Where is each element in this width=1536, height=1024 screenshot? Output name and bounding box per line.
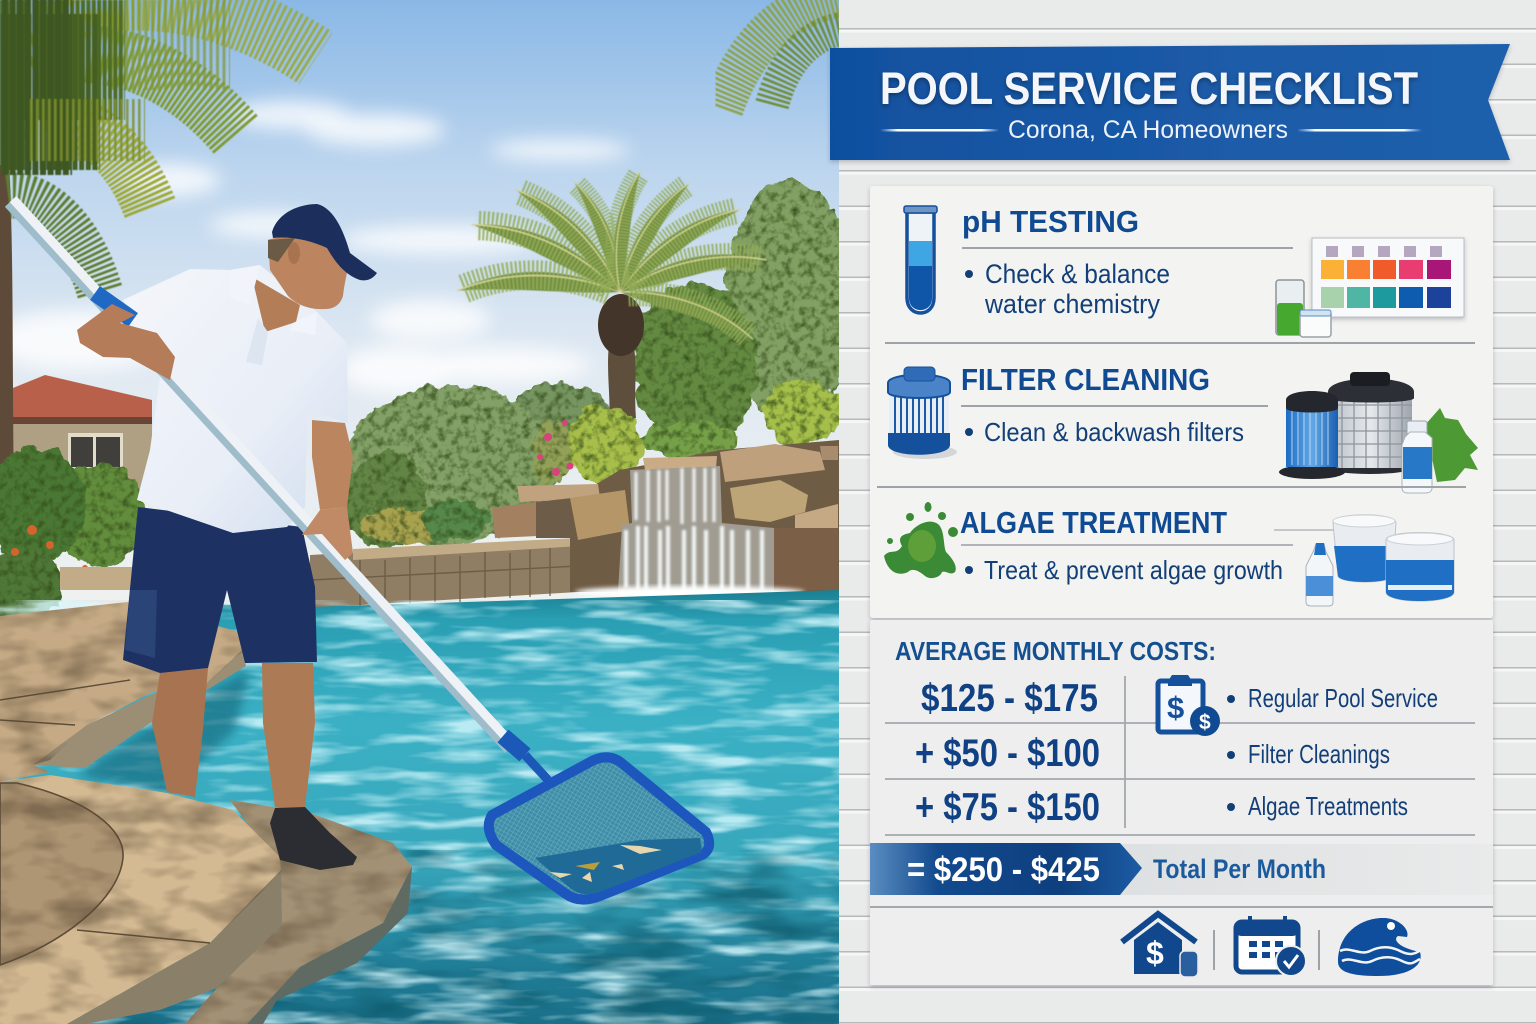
panel: services checklist	[870, 186, 1493, 618]
cargo pocket	[125, 590, 157, 658]
background trees	[343, 180, 856, 548]
shirt collar	[230, 265, 317, 335]
costs heading: AVERAGE MONTHLY COSTS:	[895, 636, 1216, 666]
cost amounts: + $75 - $150	[915, 786, 1100, 829]
icon: clipboard with dollar: $	[1199, 711, 1211, 734]
bullet text: Check & balance	[985, 259, 1170, 289]
bullet text: water chemistry	[984, 289, 1160, 319]
palm canopy	[0, 0, 316, 292]
icon: filter cartridge	[888, 367, 957, 459]
flowering shrubs	[360, 378, 840, 543]
net collar	[503, 736, 525, 755]
icon: algae splat	[884, 502, 958, 578]
lower hand	[302, 507, 353, 560]
net frame and mesh	[489, 757, 709, 900]
waterfall rocks	[492, 440, 839, 592]
front stone deck	[0, 775, 282, 1024]
navy cargo shorts	[123, 507, 317, 673]
left leg	[152, 668, 208, 797]
net pocket water	[535, 838, 702, 894]
left palm tree	[0, 0, 316, 490]
icon: house with dollar: $	[1146, 935, 1164, 971]
icon: test tube	[904, 206, 937, 313]
total label: Total Per Month	[1153, 854, 1326, 884]
neck	[254, 280, 300, 332]
deck shadow on water	[78, 670, 250, 795]
navy cap	[272, 204, 377, 280]
stone retaining wall	[60, 538, 580, 608]
head	[268, 236, 350, 309]
total band	[870, 843, 1493, 895]
palm trunk	[0, 165, 14, 464]
cost table rules	[885, 676, 1475, 835]
section: filter cleaning	[888, 362, 1478, 493]
heading: ALGAE TREATMENT	[960, 505, 1227, 540]
title ribbon	[830, 44, 1510, 160]
title: POOL SERVICE CHECKLIST	[880, 63, 1418, 114]
technician	[10, 199, 513, 870]
subtitle: Corona, CA Homeowners	[1008, 116, 1288, 144]
upper arm and hand	[77, 304, 175, 380]
lower wet ledge	[185, 800, 412, 1024]
icon: grey filter	[1328, 372, 1414, 474]
center palm tree	[457, 170, 766, 418]
sky with clouds	[0, 0, 839, 478]
heading: FILTER CLEANING	[961, 362, 1210, 397]
cost labels: Regular Pool Service	[1248, 683, 1438, 713]
cost labels: Filter Cleanings	[1248, 739, 1390, 769]
pool water	[0, 590, 839, 1024]
icon: algae patch behind filter	[1425, 408, 1478, 482]
inner circular paver	[0, 783, 123, 965]
palm trunk	[608, 345, 636, 418]
hair	[268, 238, 295, 262]
icon: house with dollar	[1122, 914, 1198, 977]
house with terracotta roof	[8, 375, 152, 490]
icon: treatment bottle	[1306, 543, 1333, 606]
icon: chlorine bucket front	[1386, 532, 1454, 601]
bullet text: Treat & prevent algae growth	[984, 555, 1283, 585]
bullet text: Clean & backwash filters	[984, 417, 1244, 447]
telescopic pole	[10, 202, 510, 748]
palm hanging leaflets	[112, 0, 230, 90]
icon: pH color chart	[1312, 238, 1464, 317]
waterfall	[575, 466, 805, 598]
upper curved pool deck	[0, 602, 246, 782]
photo: pool technician skimming a backyard pool	[0, 0, 856, 1024]
cost amounts: + $50 - $100	[915, 732, 1100, 775]
icon: water sample beakers	[1276, 280, 1331, 337]
total amount: = $250 - $425	[907, 851, 1100, 889]
cost amounts: $125 - $175	[921, 677, 1098, 720]
panel: monthly costs	[870, 620, 1493, 985]
right leg	[262, 663, 315, 807]
ear	[288, 242, 300, 264]
top right palm fronds	[722, 0, 850, 110]
section: pH testing	[904, 204, 1464, 337]
icon: clipboard with dollar: $	[1167, 690, 1184, 725]
cost amounts	[915, 677, 1100, 829]
palm fruit boss	[598, 294, 644, 356]
heading: pH TESTING	[962, 204, 1139, 239]
deck edge	[33, 650, 246, 768]
skimmer net	[489, 736, 709, 900]
footer icons	[1122, 914, 1421, 977]
right arm	[312, 420, 353, 510]
work shoe	[270, 807, 357, 870]
waterfall splash	[575, 586, 805, 598]
palm crown fronds	[457, 170, 766, 339]
pole grip	[95, 293, 133, 320]
white polo shirt	[123, 265, 348, 533]
shirt placket	[246, 318, 268, 365]
icon: blue filter	[1279, 391, 1345, 479]
section: algae treatment	[884, 502, 1454, 606]
deck riser	[67, 870, 282, 1024]
icon: chemical bottle	[1402, 421, 1432, 493]
pink blossoms	[537, 420, 574, 476]
cost labels	[1227, 683, 1438, 821]
left hedge and flowers	[0, 447, 146, 621]
siding background	[839, 0, 1536, 1024]
icon: pool wave	[1338, 918, 1421, 976]
icon: clipboard with dollar	[1158, 675, 1220, 736]
hedge flowers	[11, 525, 88, 571]
debris	[550, 845, 662, 882]
deck shade	[0, 600, 420, 1024]
icon: calendar with check	[1236, 916, 1306, 976]
icon: chlorine bucket rear	[1333, 515, 1396, 582]
bullet text	[965, 259, 1170, 319]
subtitle flourishes	[880, 129, 1422, 132]
cost labels: Algae Treatments	[1248, 791, 1408, 821]
